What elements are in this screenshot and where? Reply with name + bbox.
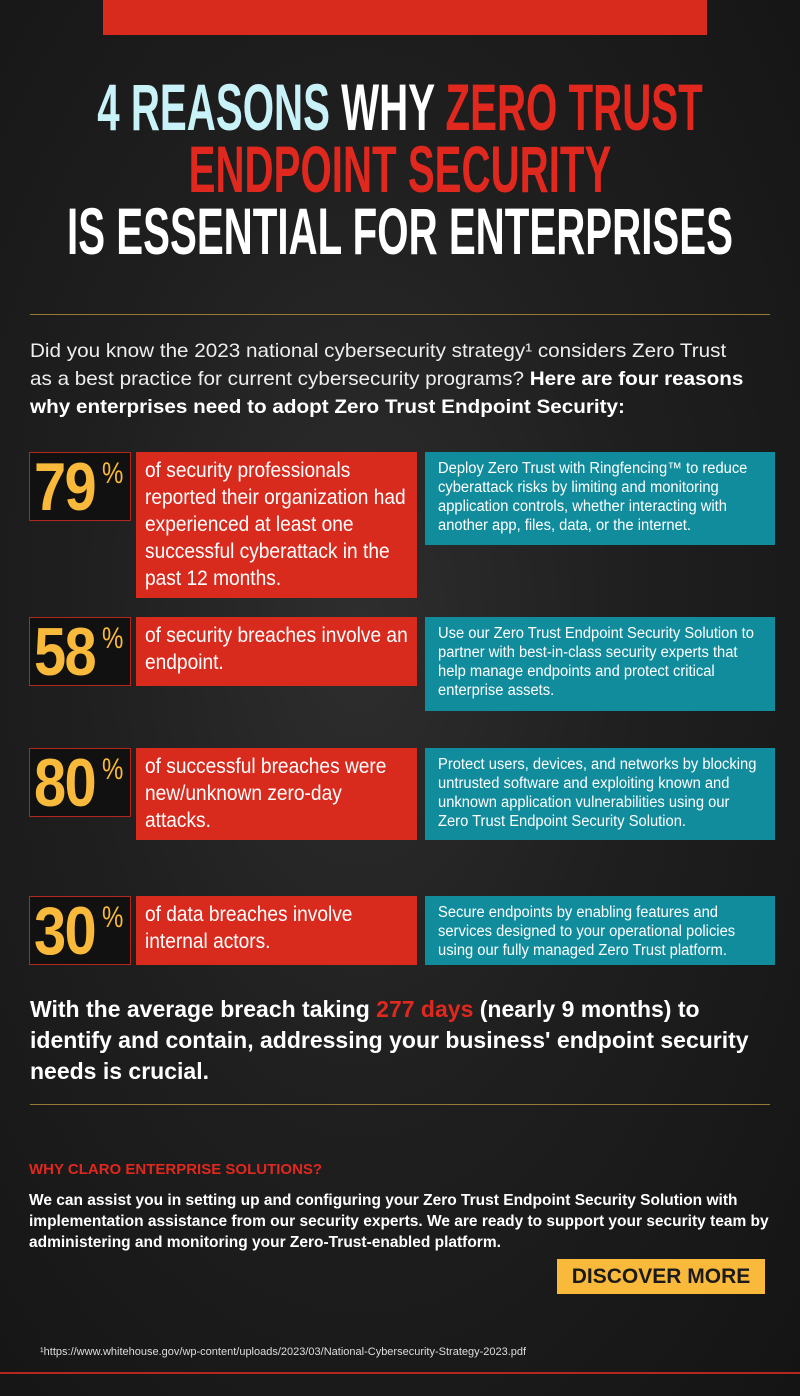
title: [67, 70, 733, 268]
intro text: Did you know the 2023 national cybersecurity strategy¹ considers Zero Trust: [30, 340, 726, 362]
stat 30: %: [102, 901, 123, 934]
row 3: [29, 748, 775, 840]
title: IS ESSENTIAL FOR ENTERPRISES: [67, 194, 733, 268]
teal 3: Protect users, devices, and networks by blocking untrusted software and exploiting known and unknown application vulnerabilities using our Zero Trust Endpoint Security Solution.: [438, 756, 756, 830]
red text 4: of data breaches involve internal actors.: [145, 902, 352, 953]
stat 80: %: [102, 753, 123, 786]
intro text: [30, 340, 743, 418]
discover more button: [557, 1259, 765, 1294]
red text 3: of successful breaches were new/unknown zero-day attacks.: [145, 754, 386, 832]
teal 1: Deploy Zero Trust with Ringfencing™ to reduce cyberattack risks by limiting and monitoring application controls, whether interacting with another app, files, data, or the internet.: [438, 460, 747, 534]
title: 4 REASONS WHY ZERO TRUST: [97, 70, 703, 144]
stat 30: [29, 896, 131, 965]
row 2: [29, 617, 775, 711]
why claro heading: WHY CLARO ENTERPRISE SOLUTIONS?: [29, 1161, 322, 1178]
stat 79: [29, 452, 131, 521]
discover more button: DISCOVER MORE: [572, 1265, 750, 1288]
row 4: [29, 896, 775, 965]
stat 80: [29, 748, 131, 817]
why claro text: We can assist you in setting up and configuring your Zero Trust Endpoint Security Solution with implementation assistance from our security experts. We are ready to support your security team by administering and monitoring your Zero-Trust-enabled platform.: [29, 1192, 769, 1251]
red text 2: of security breaches involve an endpoint.: [145, 623, 408, 674]
red text 4: [136, 896, 417, 965]
title: ENDPOINT SECURITY: [189, 132, 611, 206]
teal 4: Secure endpoints by enabling features and services designed to your operational policies using our fully managed Zero Trust platform.: [438, 904, 735, 959]
conclusion text: With the average breach taking 277 days (nearly 9 months) to identify and contain, addressing your business' endpoint security needs is crucial.: [30, 996, 749, 1084]
stat 79: %: [102, 457, 123, 490]
top red bar: [103, 0, 707, 35]
row 1: [29, 452, 775, 598]
footnote: ¹https://www.whitehouse.gov/wp-content/uploads/2023/03/National-Cybersecurity-Strategy-2023.pdf: [40, 1346, 526, 1358]
intro text: why enterprises need to adopt Zero Trust Endpoint Security:: [30, 396, 625, 418]
red text 1: of security professionals reported their organization had experienced at least one successful cyberattack in the past 12 months.: [145, 458, 406, 590]
teal 4: [425, 896, 775, 965]
stat 58: %: [102, 622, 123, 655]
stat 58: [29, 617, 131, 686]
teal 2: Use our Zero Trust Endpoint Security Solution to partner with best-in-class security experts that help manage endpoints and protect critical enterprise assets.: [438, 625, 754, 699]
intro text: as a best practice for current cybersecurity programs? Here are four reasons: [30, 368, 743, 390]
red text 2: [136, 617, 417, 686]
